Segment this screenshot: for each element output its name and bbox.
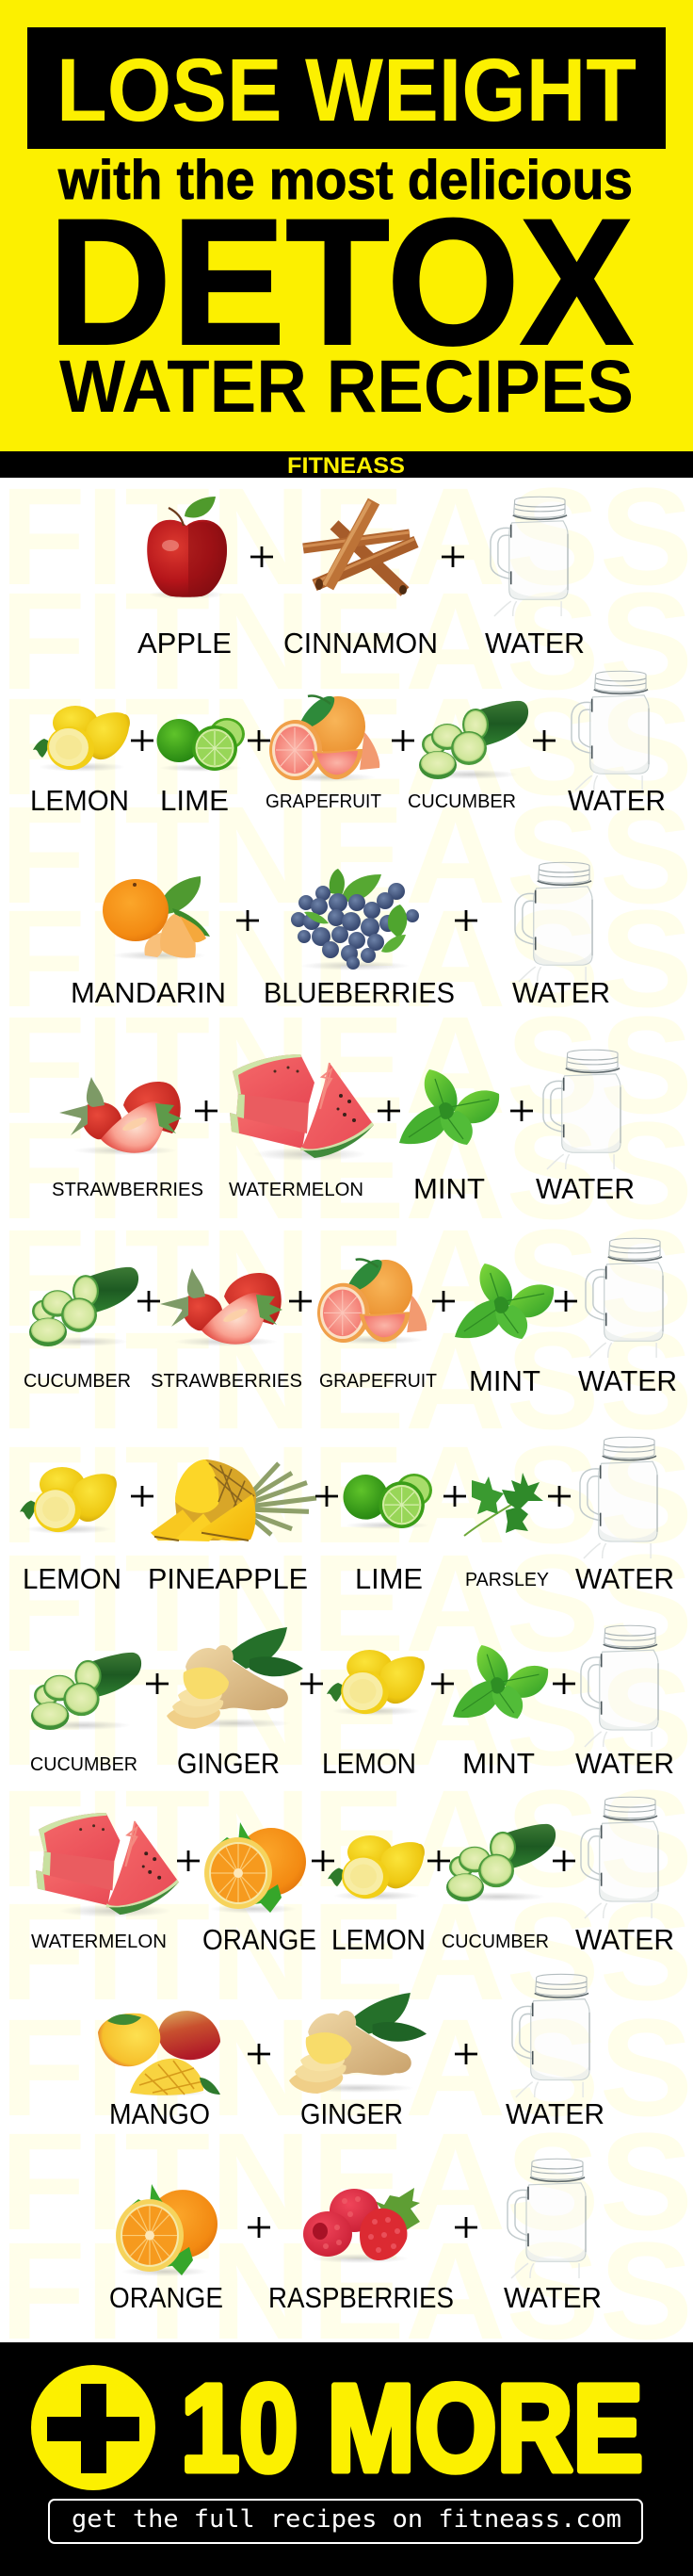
heading box: LOSE WEIGHT: LOSE WEIGHT (56, 41, 637, 140)
label: lemon: LEMON (30, 784, 129, 817)
plus (131, 1486, 153, 1507)
label: grapefruit: GRAPEFRUIT (319, 1371, 437, 1392)
plus (431, 1673, 454, 1694)
plus (195, 1101, 218, 1121)
label: lime: LIME (355, 1562, 423, 1595)
label: water: WATER (575, 1923, 674, 1956)
plus (432, 1291, 455, 1312)
icon: water jar (543, 1050, 620, 1169)
label: water: WATER (504, 2281, 602, 2314)
plus (555, 1291, 577, 1312)
panel: yellow header (0, 0, 693, 451)
plus (553, 1850, 575, 1871)
label: raspberries: RASPBERRIES (268, 2281, 454, 2314)
icon: orange (116, 2184, 218, 2276)
label: ginger: GINGER (300, 2097, 403, 2130)
icon: cucumber (446, 1824, 556, 1901)
icon: mango (98, 2011, 220, 2096)
heading: WATER RECIPES: WATER RECIPES (59, 344, 634, 428)
plus (442, 546, 464, 567)
watermark: repeated FITNEASS background: FITNEASS (0, 460, 693, 614)
plus (315, 1486, 338, 1507)
label: blueberries: BLUEBERRIES (264, 976, 455, 1009)
label: strawberries: STRAWBERRIES (151, 1371, 302, 1392)
label: water: WATER (575, 1747, 674, 1780)
watermark: repeated FITNEASS background: FITNEASS (0, 670, 693, 824)
label: parsley: PARSLEY (465, 1570, 549, 1590)
label: watermelon: WATERMELON (31, 1932, 167, 1952)
plus (548, 1486, 571, 1507)
recipe 5: cucumber, strawberries, grapefruit, mint, water (24, 1238, 677, 1397)
label: cucumber: CUCUMBER (442, 1932, 549, 1952)
icon: lime (156, 718, 245, 772)
icon: water jar (515, 862, 592, 982)
label: water: WATER (536, 1172, 635, 1205)
icon: pineapple (151, 1459, 316, 1541)
icon: orange (204, 1822, 306, 1914)
watermark: repeated FITNEASS background: FITNEASS (0, 1201, 693, 1356)
icon: ginger (167, 1627, 303, 1729)
label: lemon: LEMON (322, 1747, 416, 1780)
plus (427, 1850, 450, 1871)
icon: yellow circle with plus (31, 2365, 155, 2490)
label: mango: MANGO (109, 2097, 210, 2130)
watermark: repeated FITNEASS background: FITNEASS (0, 1762, 693, 1916)
label: mint: MINT (469, 1364, 540, 1397)
label: water: WATER (578, 1364, 677, 1397)
icon: lemon (327, 1650, 425, 1719)
recipe 7: cucumber, ginger, lemon, mint, water (30, 1625, 674, 1780)
icon: water jar (581, 1797, 658, 1918)
icon: mint (453, 1645, 548, 1719)
icon: lemon (328, 1835, 425, 1903)
watermark: repeated FITNEASS background: FITNEASS (0, 778, 693, 933)
icon: cucumber (31, 1653, 141, 1730)
plus (378, 1101, 400, 1121)
watermark: repeated FITNEASS background: FITNEASS (0, 1094, 693, 1248)
watermark: repeated FITNEASS background: FITNEASS (0, 1526, 693, 1681)
label: pineapple: PINEAPPLE (148, 1562, 308, 1595)
watermark: repeated FITNEASS background: FITNEASS (0, 564, 693, 719)
watermark: repeated FITNEASS background: FITNEASS (0, 882, 693, 1036)
watermark: repeated FITNEASS background: FITNEASS (0, 1991, 693, 2145)
watermark: repeated FITNEASS background: FITNEASS (0, 988, 693, 1143)
icon: water jar (572, 671, 649, 791)
label: mint: MINT (413, 1172, 485, 1205)
label: lime: LIME (160, 784, 229, 817)
icon: lemon (20, 1467, 117, 1537)
icon: cucumber (419, 701, 528, 779)
icon: ginger (289, 1993, 427, 2094)
plus (533, 730, 556, 751)
watermark: repeated FITNEASS background: FITNEASS (0, 2105, 693, 2259)
heading: DETOX: DETOX (48, 182, 634, 383)
watermark: repeated FITNEASS background (0, 460, 693, 2369)
plus (289, 1291, 312, 1312)
label: lemon: LEMON (23, 1562, 121, 1595)
recipe 6: lemon, pineapple, lime, parsley, water (20, 1437, 674, 1595)
icon: water jar (491, 497, 568, 616)
plus (510, 1101, 533, 1121)
label: strawberries: STRAWBERRIES (52, 1180, 203, 1200)
icon: apple (147, 497, 227, 599)
icon: mandarin (103, 876, 210, 960)
recipe 3: mandarin, blueberries, water (71, 862, 610, 1009)
icon: raspberries (303, 2188, 420, 2263)
recipe 2: lemon, lime, grapefruit, cucumber, water (30, 671, 666, 817)
icon: strawberries (59, 1077, 182, 1155)
icon: water jar (581, 1625, 658, 1747)
icon: cucumber (29, 1267, 138, 1346)
icon: mint (399, 1069, 499, 1145)
label: mint: MINT (462, 1747, 535, 1780)
label: apple: APPLE (137, 627, 232, 660)
icon: lime (343, 1474, 432, 1529)
icon: watermelon (36, 1813, 179, 1917)
plus (248, 730, 270, 751)
label: water: WATER (506, 2097, 604, 2130)
recipe 4: strawberries, watermelon, mint, water (52, 1050, 635, 1205)
plus (553, 1673, 575, 1694)
call to action box (49, 2500, 642, 2543)
watermark: repeated FITNEASS background: FITNEASS (0, 1640, 693, 1795)
watermark: repeated FITNEASS background: FITNEASS (0, 1418, 693, 1573)
plus (392, 730, 414, 751)
plus (455, 910, 477, 931)
plus (248, 2217, 270, 2238)
panel: black footer (0, 2342, 693, 2576)
label: cucumber: CUCUMBER (30, 1754, 137, 1775)
recipe 10: orange, raspberries, water (109, 2159, 602, 2314)
watermark: repeated FITNEASS background: FITNEASS (0, 1875, 693, 2030)
label: lemon: LEMON (331, 1923, 426, 1956)
recipe 9: mango, ginger, water (98, 1974, 604, 2130)
watermark: repeated FITNEASS background: FITNEASS (0, 1304, 693, 1459)
label: water: WATER (575, 1562, 674, 1595)
plus (312, 1850, 334, 1871)
icon: blueberries (291, 869, 419, 970)
label: cucumber: CUCUMBER (24, 1371, 131, 1392)
brand bar: FITNEASS (287, 453, 405, 479)
plus (137, 1291, 160, 1312)
icon: strawberries (160, 1268, 282, 1346)
plus (131, 730, 153, 751)
icon: lemon (33, 706, 130, 774)
plus (443, 1486, 466, 1507)
plus (455, 2217, 477, 2238)
icon: watermelon (230, 1054, 374, 1161)
label: mandarin: MANDARIN (71, 976, 226, 1009)
subheading: with the most delicious (57, 150, 633, 211)
label: water: WATER (512, 976, 610, 1009)
plus (146, 1673, 169, 1694)
recipe 8: watermelon, orange, lemon, cucumber, water (31, 1797, 674, 1956)
label: water: WATER (485, 627, 585, 660)
label: orange: ORANGE (202, 1923, 316, 1956)
icon: water jar (508, 2159, 586, 2278)
label: orange: ORANGE (109, 2281, 223, 2314)
icon: mint (455, 1264, 554, 1339)
brand bar (0, 451, 693, 479)
recipe 1: apple, cinnamon, water (137, 497, 585, 660)
label: cucumber: CUCUMBER (408, 791, 516, 812)
plus (236, 910, 259, 931)
label: watermelon: WATERMELON (229, 1180, 363, 1200)
label: cinnamon: CINNAMON (283, 627, 438, 660)
plus (455, 2044, 477, 2064)
icon: water jar (512, 1974, 589, 2097)
icon: water jar (580, 1437, 657, 1558)
icon: water jar (586, 1238, 663, 1358)
icon: grapefruit (269, 695, 379, 782)
icon: grapefruit (317, 1259, 427, 1345)
label: grapefruit: GRAPEFRUIT (266, 791, 381, 812)
plus (177, 1850, 200, 1871)
plus (248, 2044, 270, 2064)
icon: parsley (464, 1473, 543, 1536)
plus (250, 546, 273, 567)
call to action box: get the full recipes on fitneass.com (72, 2505, 621, 2534)
label: water: WATER (568, 784, 666, 817)
label: ginger: GINGER (177, 1747, 280, 1780)
plus (300, 1673, 323, 1694)
watermark: repeated FITNEASS background: FITNEASS (0, 2214, 693, 2369)
icon: cinnamon (303, 501, 416, 595)
